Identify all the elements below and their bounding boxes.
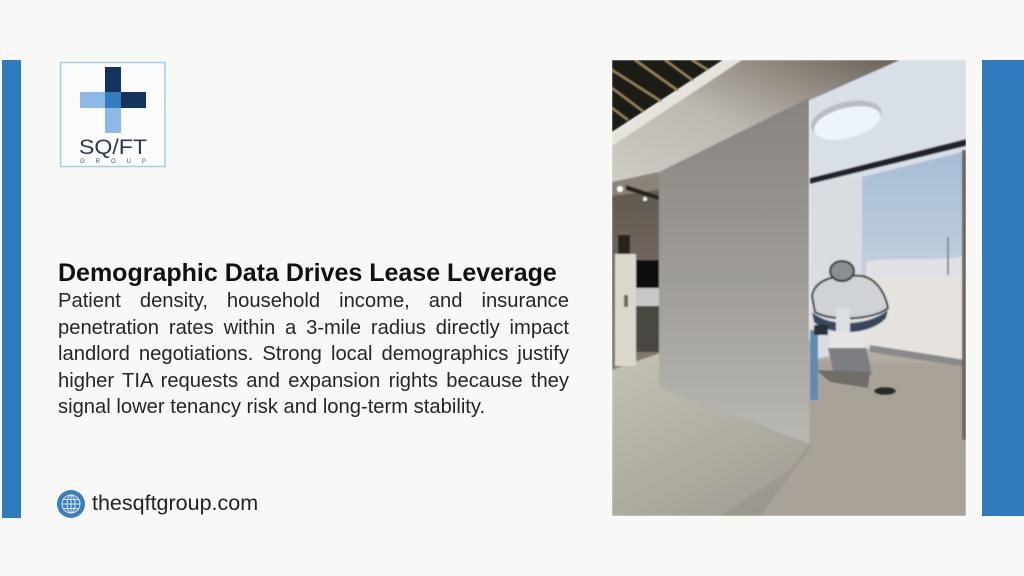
heading: Demographic Data Drives Lease Leverage: [58, 259, 557, 287]
lamp: [807, 94, 886, 146]
dental chair: [810, 261, 896, 400]
icon: globe: [57, 490, 85, 518]
logo cross: [80, 67, 146, 133]
body text: higher TIA requests and expansion rights because they: [58, 370, 569, 392]
right accent bar: [982, 60, 1024, 516]
logo: [60, 62, 166, 168]
right room wall and ceiling: [807, 60, 966, 440]
logo wordmark: SQ/FT: [79, 136, 147, 159]
floor: [612, 340, 966, 516]
window: [862, 151, 966, 277]
body text: penetration rates within a 3-mile radius directly impact: [58, 316, 569, 338]
body text: Patient density, household income, and insurance: [58, 290, 569, 312]
right room floor: [760, 360, 966, 516]
photo: dental office interior: [612, 60, 966, 516]
body text: landlord negotiations. Strong local demographics justify: [58, 343, 569, 365]
corridor: [612, 172, 660, 370]
partition wall: [659, 98, 809, 444]
ceiling slats: [612, 60, 723, 132]
logo subtitle: GROUP: [80, 159, 146, 165]
left accent bar: [2, 60, 21, 518]
body text: [58, 290, 569, 418]
beam: [612, 60, 900, 182]
website text: thesqftgroup.com: [92, 491, 258, 515]
body text: signal lower tenancy risk and long-term stability.: [58, 396, 485, 418]
floor shadow: [659, 388, 812, 516]
